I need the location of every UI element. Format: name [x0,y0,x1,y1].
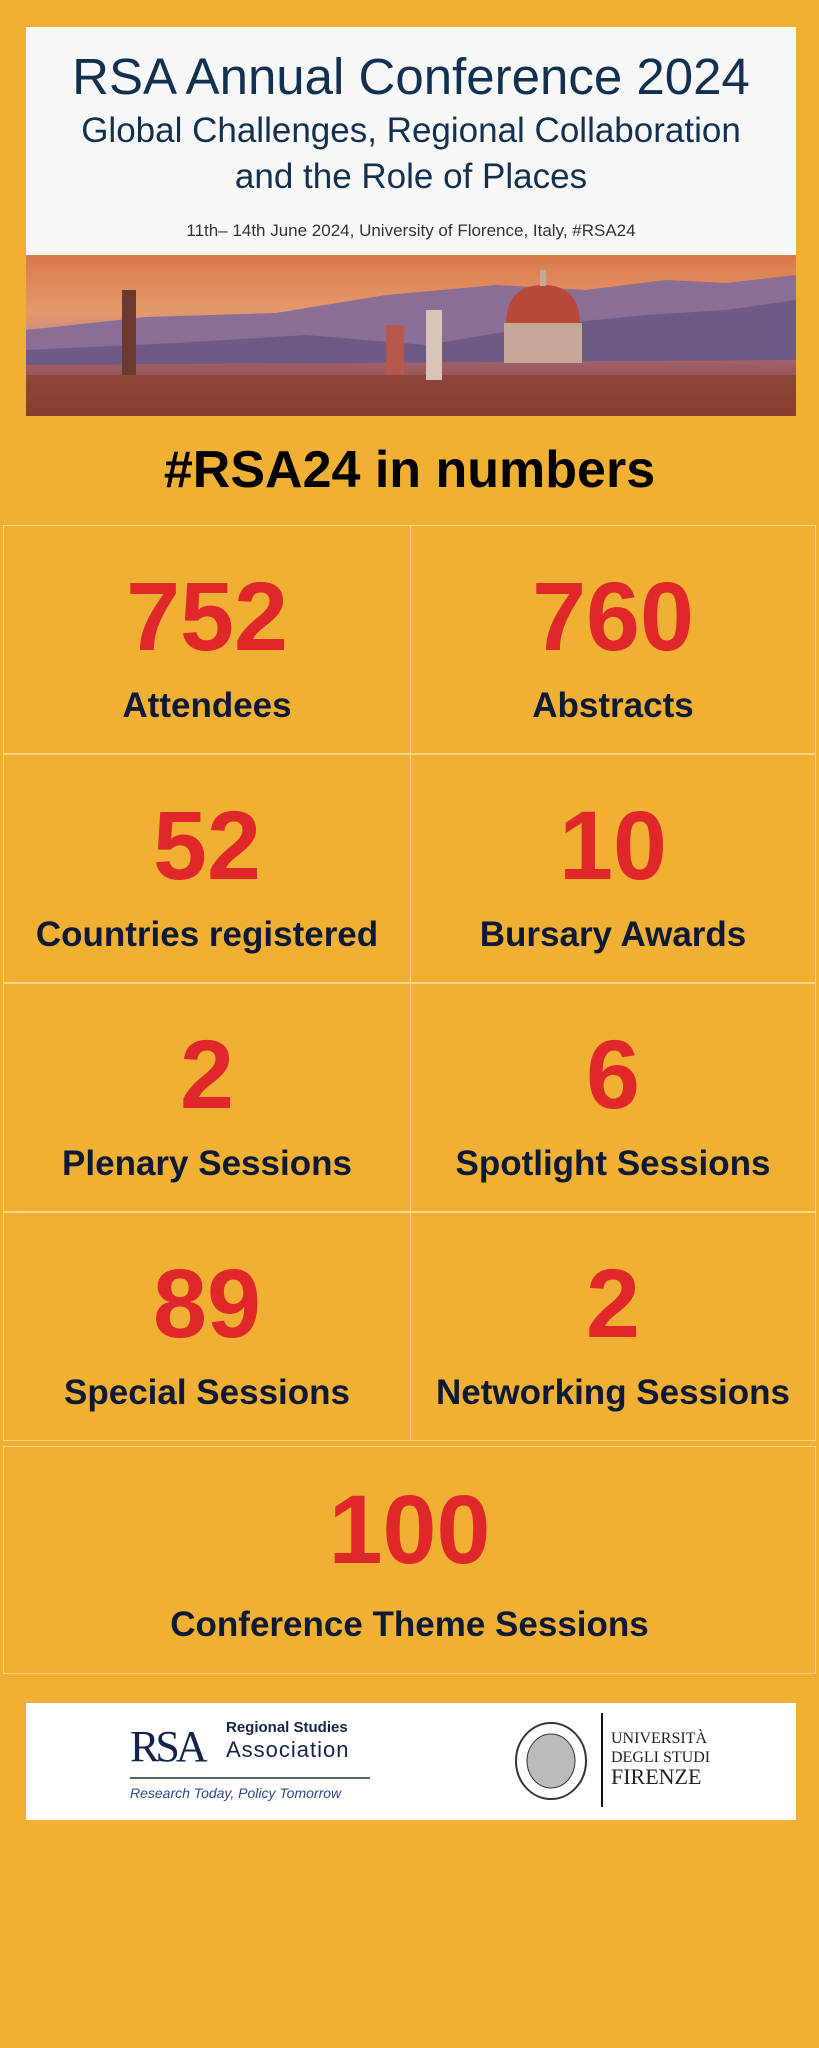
stat: attendees: Attendees [122,686,292,725]
stat: special [3,1212,411,1441]
logo: University of Florence: DEGLI STUDI [611,1749,710,1766]
logo: University of Florence [515,1713,710,1807]
photo: Florence skyline [26,255,796,416]
stat: countries: Countries registered [36,915,378,954]
stat: theme sessions [3,1446,816,1674]
stat: special: Special Sessions [64,1373,350,1412]
stat: abstracts [410,525,816,754]
title: RSA Annual Conference 2024 [72,48,750,105]
logo: RSA: Research Today, Policy Tomorrow [130,1785,341,1801]
date line: 11th– 14th June 2024, University of Florence, Italy, #RSA24 [186,221,636,240]
stat: spotlight [410,983,816,1212]
stat: plenary: Plenary Sessions [62,1144,352,1183]
stat: networking [410,1212,816,1441]
stats grid [3,525,816,1674]
header text block [26,27,796,255]
stat: countries [3,754,411,983]
stat: abstracts: 760 [532,562,694,671]
stat: networking: Networking Sessions [436,1373,790,1412]
header panel [26,27,796,416]
stat: theme sessions: 100 [329,1475,490,1584]
stat: bursary: 10 [559,791,667,900]
logo: University of Florence: FIRENZE [611,1764,701,1789]
subtitle: Global Challenges, Regional Collaboration [81,111,741,150]
stat: attendees: 752 [126,562,288,671]
stat: special: 89 [153,1249,261,1358]
heading: #RSA24 in numbers [164,441,655,499]
stat: networking: 2 [586,1249,640,1358]
stat: abstracts: Abstracts [532,686,694,725]
logo: RSA: Association [226,1737,350,1762]
stat: spotlight: 6 [586,1020,640,1129]
stat: bursary [410,754,816,983]
stat: bursary: Bursary Awards [480,915,746,954]
stat: plenary [3,983,411,1212]
logo: University of Florence: UNIVERSITÀ [611,1730,707,1747]
stat: plenary: 2 [180,1020,234,1129]
stat: countries: 52 [153,791,261,900]
logo: RSA: RSA [130,1722,204,1771]
stat: spotlight: Spotlight Sessions [455,1144,771,1183]
logo panel [26,1703,796,1820]
subtitle [81,111,741,196]
stat: attendees [3,525,411,754]
logo: RSA [130,1719,370,1801]
subtitle: and the Role of Places [235,157,587,196]
logo: RSA: Regional Studies [226,1719,348,1736]
stat: theme sessions: Conference Theme Sessions [170,1605,649,1644]
